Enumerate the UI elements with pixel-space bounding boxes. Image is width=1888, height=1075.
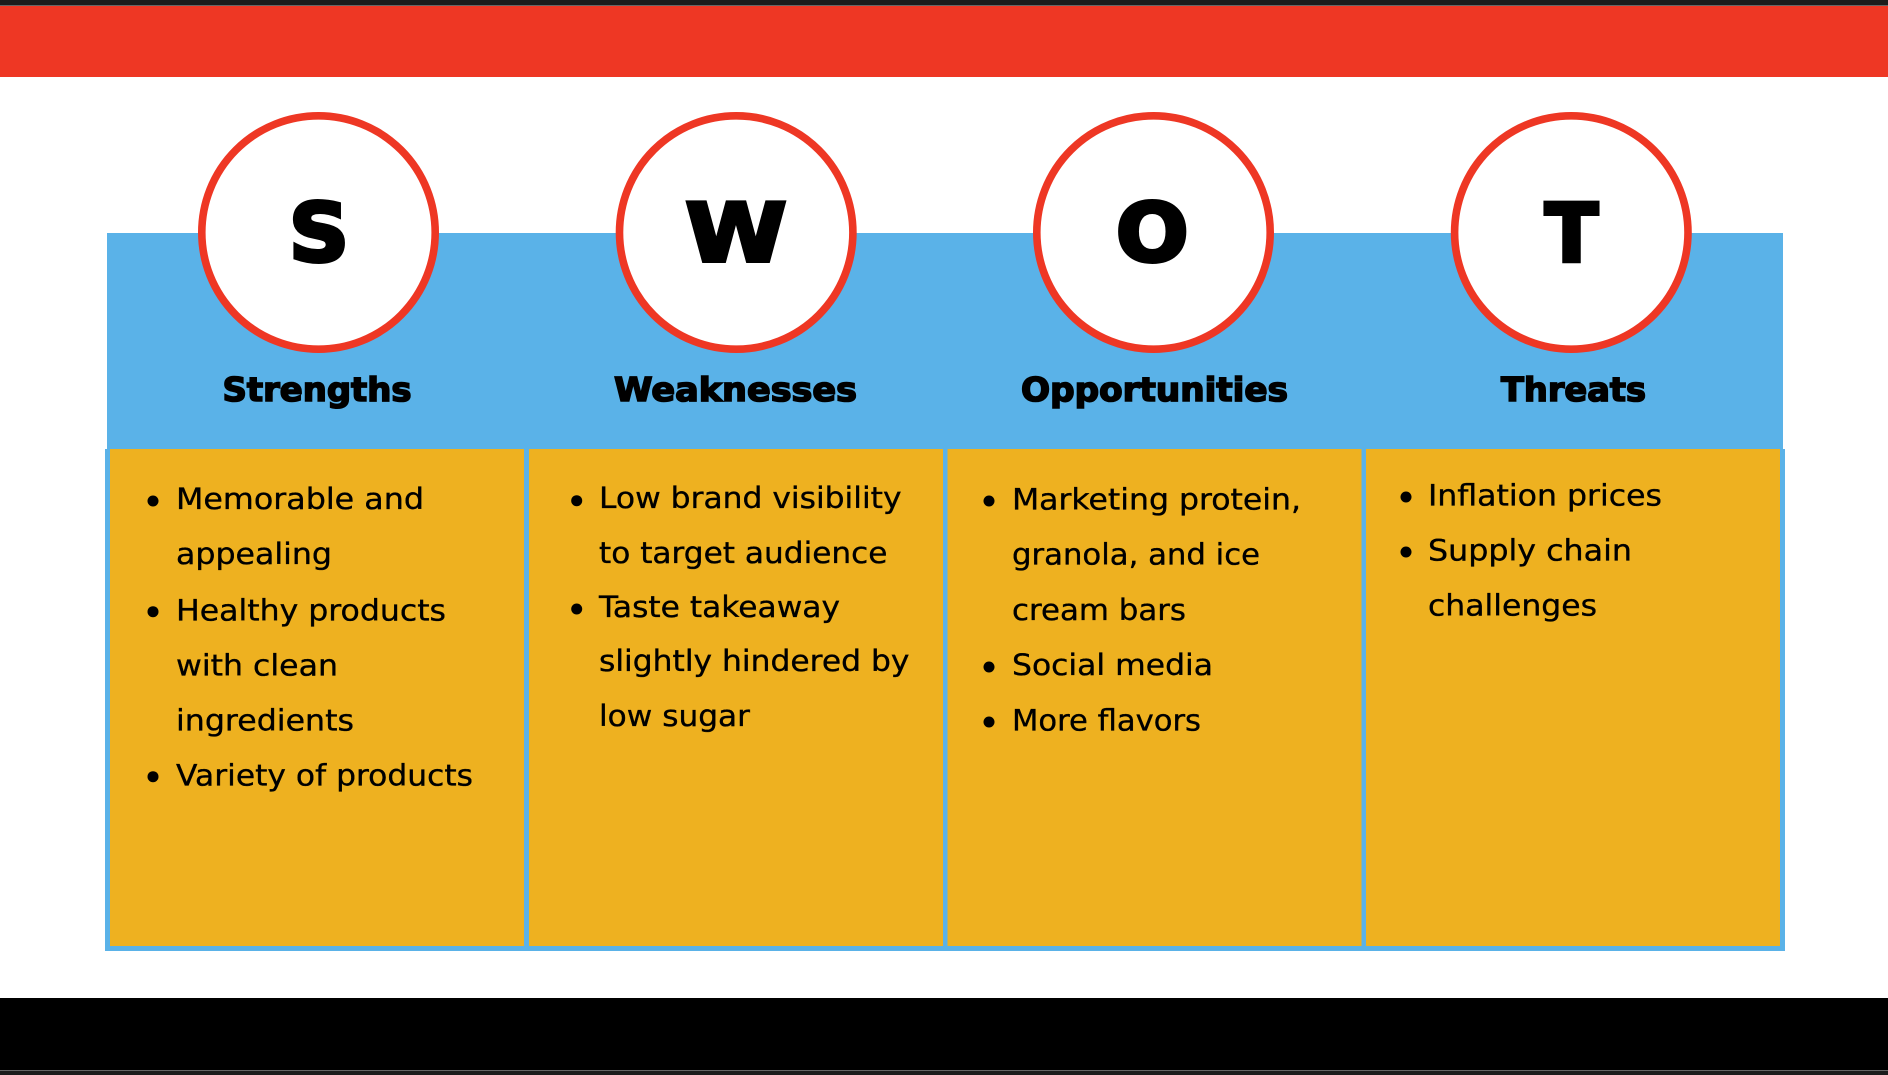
content box: strengths: appealing [176, 537, 332, 571]
content box: weaknesses [529, 449, 943, 946]
heading: opportunities: Opportunities [1021, 370, 1288, 409]
bottom black banner [0, 998, 1888, 1070]
content box: opportunities: More flavors [1012, 704, 1201, 738]
circle badge S [202, 116, 435, 349]
panel: weaknesses [529, 116, 943, 946]
panel: threats [1366, 116, 1780, 946]
circle badge T [1455, 116, 1688, 349]
heading: weaknesses: Weaknesses [614, 370, 857, 409]
content box: strengths: ingredients [176, 704, 354, 738]
panel: opportunities [948, 116, 1362, 946]
blue header band [107, 233, 1783, 449]
circle badge S: S [289, 187, 349, 280]
top red banner [0, 6, 1888, 77]
content box: weaknesses: Low brand visibility [599, 481, 902, 515]
content box: opportunities: granola, and ice [1012, 538, 1260, 572]
circle badge O: O [1116, 187, 1188, 280]
content box: opportunities: Marketing protein, [1012, 482, 1301, 516]
content box: weaknesses: low sugar [599, 699, 751, 733]
content box: threats: Inflation prices [1428, 478, 1662, 512]
content box: weaknesses: Taste takeaway [598, 590, 840, 624]
circle badge W [620, 116, 853, 349]
content box: strengths: Variety of products [176, 758, 473, 792]
content box: weaknesses: slightly hindered by [599, 644, 910, 678]
content box: opportunities: cream bars [1012, 593, 1186, 627]
content box: weaknesses: to target audience [599, 536, 888, 570]
content box: threats [1366, 449, 1780, 946]
content box: opportunities [948, 449, 1362, 946]
content box: strengths: Healthy products [176, 594, 446, 628]
content box: strengths: Memorable and [176, 482, 424, 516]
heading: threats: Threats [1501, 370, 1646, 409]
blue table frame [105, 449, 1785, 951]
content box: opportunities: Social media [1012, 648, 1213, 682]
circle badge W: W [686, 187, 786, 280]
content box: threats: challenges [1428, 588, 1597, 622]
content box: strengths [110, 449, 524, 946]
circle badge O [1037, 116, 1270, 349]
content box: threats: Supply chain [1428, 534, 1632, 568]
content box: strengths: with clean [176, 648, 338, 682]
panel: strengths [110, 116, 524, 946]
heading: strengths: Strengths [222, 370, 412, 409]
circle badge T: T [1545, 187, 1598, 280]
